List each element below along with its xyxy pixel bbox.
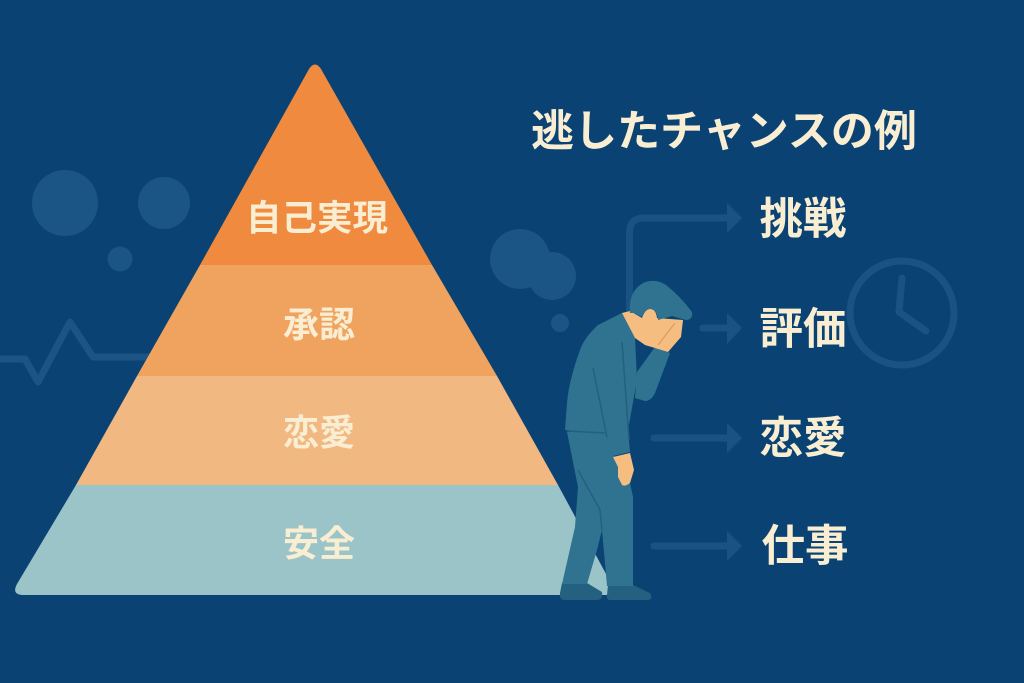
tier: 自己実現: [200, 64, 432, 265]
tier: 安全: 安全: [283, 523, 355, 564]
tier: 安全: [15, 485, 613, 595]
figure: hair: [630, 281, 692, 320]
arrow: to 評価: [703, 313, 742, 344]
arrow: to 挑戦: [630, 203, 742, 320]
dejected person figure: [560, 281, 692, 600]
background decoration: clock: [850, 261, 954, 365]
figure: neck, face and raised hand: [622, 309, 683, 352]
figure: finger line: [658, 323, 675, 345]
figure: legs: [562, 432, 633, 586]
background decoration: heartbeat line: [0, 322, 150, 382]
arrow: to 仕事: [654, 531, 742, 561]
label: 恋愛: 恋愛: [760, 415, 846, 463]
figure: sweater fold lines: [567, 342, 629, 440]
figure: shoes: [560, 583, 651, 600]
label: 挑戦: 挑戦: [760, 196, 846, 244]
label: 評価: 評価: [760, 306, 846, 354]
tier: 恋愛: 恋愛: [283, 412, 355, 453]
figure: lowered hand: [613, 453, 634, 486]
tier: 承認: [137, 265, 497, 376]
tier: 恋愛: [76, 376, 558, 485]
figure: leg fold line: [578, 470, 602, 530]
figure: raised forearm: [635, 347, 670, 401]
pyramid chart: [15, 64, 613, 595]
tier: 承認: 承認: [283, 304, 355, 345]
arrow: to 恋愛: [654, 423, 742, 453]
tier: 自己実現: 自己実現: [246, 198, 388, 238]
figure: torso and lowered arm: [565, 313, 637, 456]
title: 逃したチャンスの例: [531, 108, 917, 156]
background decoration: circles: [32, 170, 576, 332]
label: 仕事: 仕事: [762, 523, 848, 571]
